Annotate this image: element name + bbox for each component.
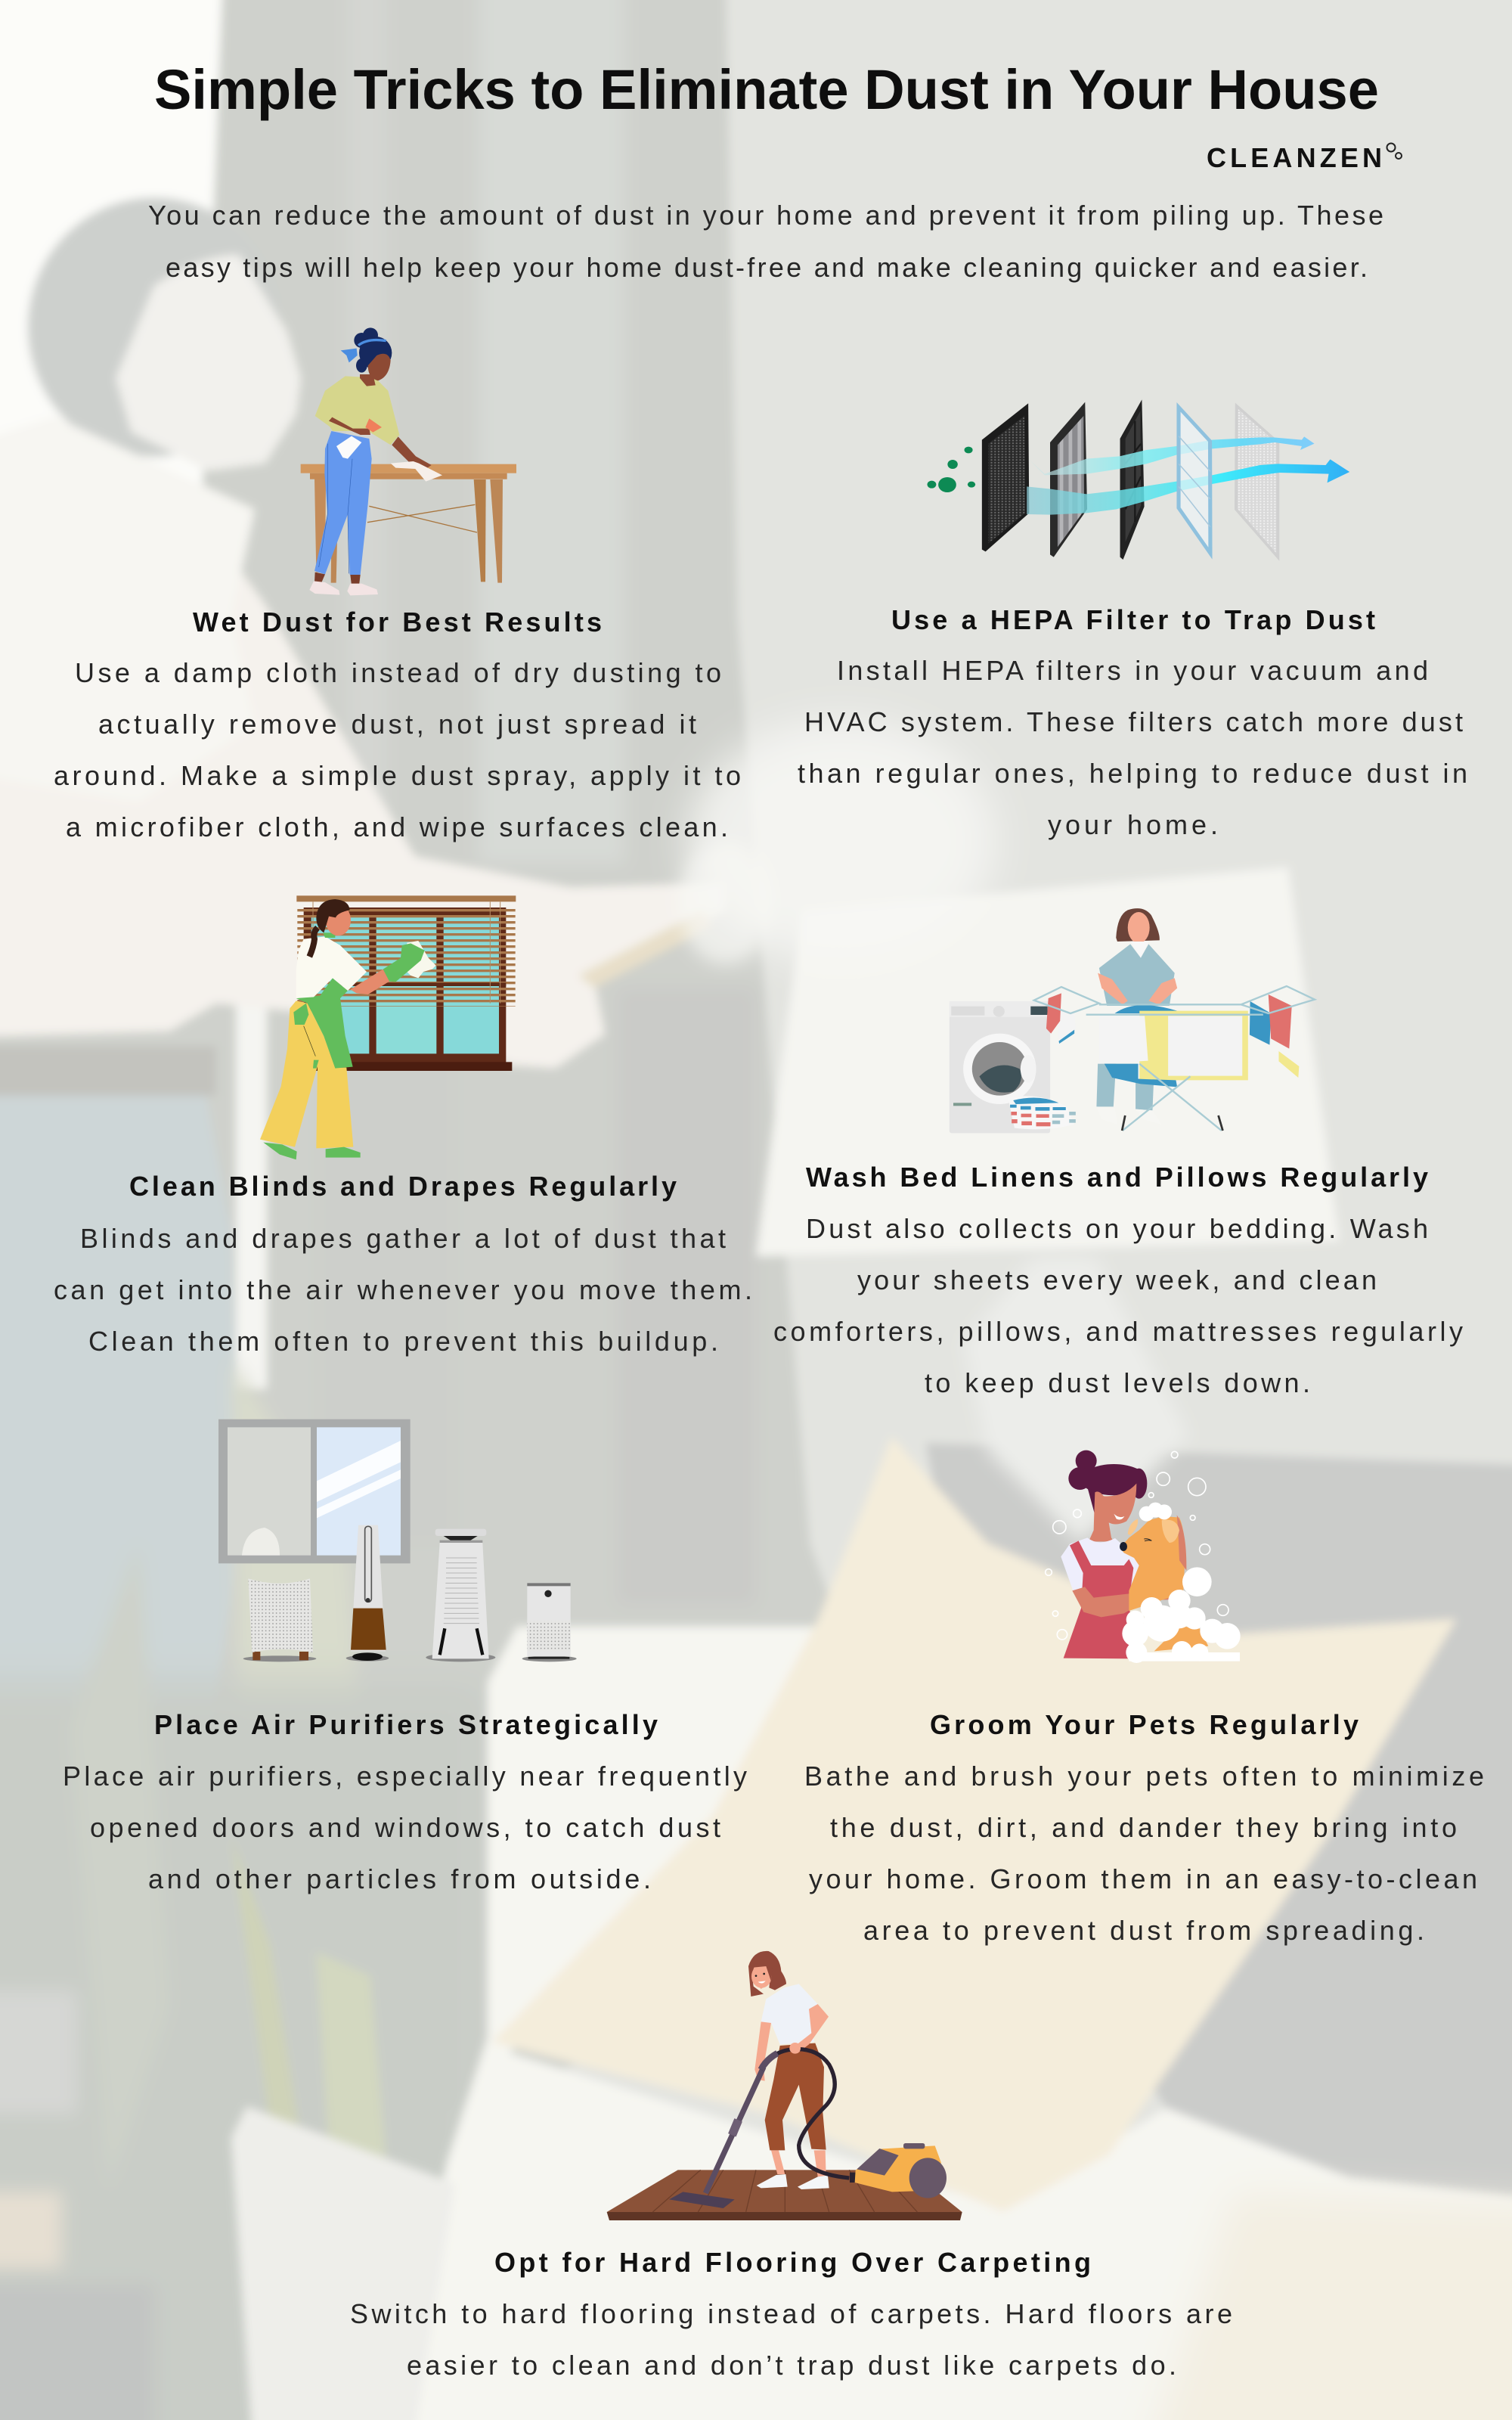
body text: comforters, pillows, and mattresses regularly [773, 1316, 1463, 1347]
body text: can get into the air whenever you move them. [54, 1274, 752, 1305]
body text: Switch to hard flooring instead of carpets. Hard floors are [350, 2298, 1232, 2329]
icon: woman bathing a dog [1046, 1450, 1241, 1663]
panel: wash bed linens [773, 908, 1463, 1398]
body text: a microfiber cloth, and wipe surfaces clean. [66, 811, 728, 842]
panel: HEPA filter [798, 399, 1467, 840]
body text: to keep dust levels down. [925, 1367, 1310, 1398]
panel: wet dust [54, 327, 741, 842]
intro text: easy tips will help keep your home dust-free and make cleaning quicker and easier. [166, 252, 1368, 283]
body text: than regular ones, helping to reduce dust in [798, 758, 1467, 789]
panel: hard flooring [350, 1951, 1232, 2381]
body text [798, 655, 1467, 840]
body text: around. Make a simple dust spray, apply it to [54, 760, 741, 791]
body text: opened doors and windows, to catch dust [90, 1812, 720, 1843]
body text: Install HEPA filters in your vacuum and [837, 655, 1428, 686]
body text: actually remove dust, not just spread it [98, 709, 696, 740]
panel: air purifiers [63, 1419, 747, 1894]
body text: Blinds and drapes gather a lot of dust that [80, 1223, 726, 1254]
body text [350, 2298, 1232, 2381]
icon: woman vacuuming a wooden floor [607, 1951, 962, 2220]
panel: blinds and drapes [54, 895, 752, 1357]
body text [63, 1761, 747, 1894]
intro text: You can reduce the amount of dust in your home and prevent it from piling up. These [148, 200, 1383, 231]
body text: Bathe and brush your pets often to minimize [804, 1761, 1484, 1792]
body text [773, 1213, 1463, 1398]
body text: area to prevent dust from spreading. [863, 1915, 1424, 1946]
body text: HVAC system. These filters catch more dust [804, 706, 1463, 737]
heading: Wet Dust for Best Results [193, 607, 602, 638]
icon: HEPA filter layers with air flow [927, 399, 1349, 560]
icon: woman with laundry rack and washing machine [950, 908, 1315, 1133]
body text: Place air purifiers, especially near frequently [63, 1761, 747, 1792]
body text: your home. Groom them in an easy-to-clean [809, 1863, 1477, 1894]
logo: Cleanzen: CLEANZEN [1207, 142, 1382, 173]
body text: Dust also collects on your bedding. Wash [806, 1213, 1428, 1244]
heading: Wash Bed Linens and Pillows Regularly [806, 1162, 1428, 1193]
heading: Groom Your Pets Regularly [930, 1709, 1359, 1740]
icon: window with four air purifiers [218, 1419, 577, 1661]
body text: your home. [1048, 809, 1218, 840]
heading: Use a HEPA Filter to Trap Dust [891, 604, 1375, 635]
body text: your sheets every week, and clean [857, 1264, 1377, 1295]
title: Simple Tricks to Eliminate Dust in Your House [154, 58, 1379, 121]
icon: woman wiping a table [301, 327, 516, 595]
body text: easier to clean and don’t trap dust like carpets do. [407, 2350, 1176, 2381]
panel: groom pets [804, 1450, 1484, 1946]
body text [54, 1223, 752, 1357]
body text [804, 1761, 1484, 1946]
heading: Clean Blinds and Drapes Regularly [129, 1171, 677, 1202]
body text: Clean them often to prevent this buildup. [88, 1326, 718, 1357]
body text [54, 657, 741, 842]
body text: and other particles from outside. [148, 1863, 651, 1894]
intro text [148, 200, 1383, 283]
body text: the dust, dirt, and dander they bring into [830, 1812, 1457, 1843]
body text: Use a damp cloth instead of dry dusting to [75, 657, 721, 688]
heading: Opt for Hard Flooring Over Carpeting [494, 2247, 1091, 2278]
heading: Place Air Purifiers Strategically [154, 1709, 658, 1740]
icon: woman cleaning window blinds [260, 895, 516, 1159]
